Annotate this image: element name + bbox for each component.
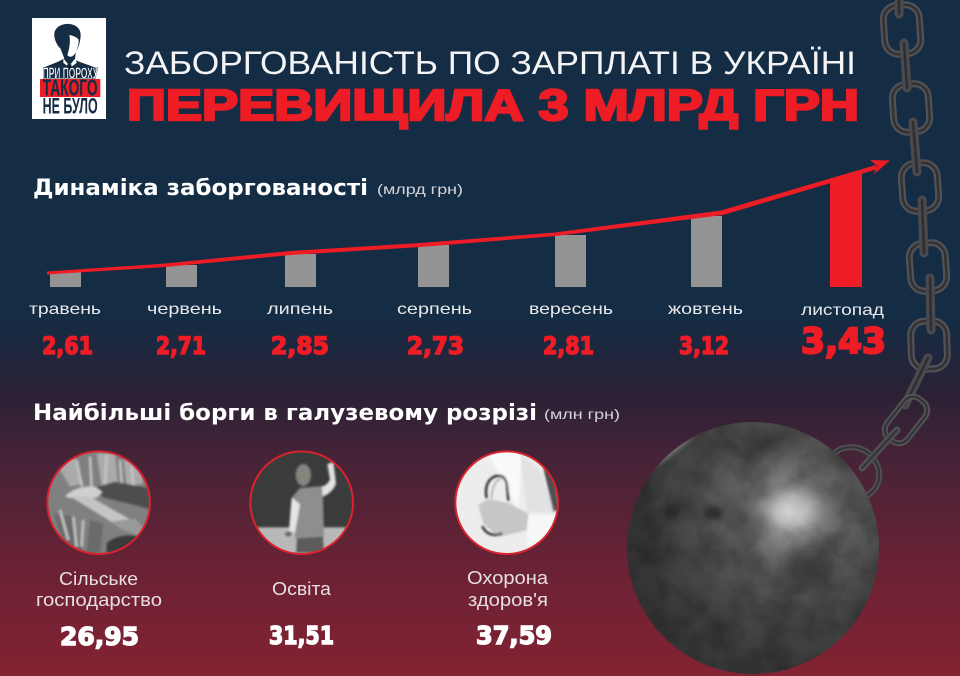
monthly values: 2,61 — [42, 332, 93, 360]
trend arrow — [47, 160, 890, 274]
sector labels — [36, 568, 549, 610]
month labels: серпень — [397, 301, 472, 318]
month labels: жовтень — [668, 301, 743, 318]
bar chart — [50, 171, 862, 287]
icon: healthcare photo — [455, 450, 559, 554]
monthly values: 2,71 — [156, 332, 206, 360]
month labels: травень — [29, 301, 101, 318]
title line 1: ЗАБОРГОВАНІСТЬ ПО ЗАРПЛАТІ В УКРАЇНІ — [124, 45, 856, 81]
month labels: листопад — [801, 302, 885, 319]
heading: dynamics: Динаміка заборгованості — [33, 176, 368, 201]
logo — [32, 18, 106, 119]
sector labels: Охорона — [467, 568, 549, 588]
sector labels: здоров'я — [468, 590, 548, 610]
chain — [836, 0, 948, 495]
month labels — [29, 301, 885, 319]
logo: ПРИ ПОРОХУ — [43, 65, 98, 82]
monthly values: 2,81 — [543, 332, 594, 360]
icon: education photo — [250, 451, 353, 557]
sector values: 31,51 — [269, 621, 334, 650]
unit: billion: (млрд грн) — [377, 181, 463, 197]
logo: НЕ БУЛО — [43, 94, 98, 119]
sector values — [60, 621, 552, 651]
logo: ТАКОГО — [43, 74, 98, 100]
month labels: вересень — [529, 301, 613, 318]
sector labels: Сільське — [59, 569, 138, 589]
monthly values: 2,85 — [271, 332, 329, 360]
monthly values — [42, 322, 886, 362]
title line 2: ПЕРЕВИЩИЛА 3 МЛРД ГРН — [127, 81, 859, 130]
wrecking ball — [627, 422, 879, 674]
monthly values: 3,12 — [679, 332, 729, 360]
sector values: 26,95 — [60, 622, 139, 651]
unit: million: (млн грн) — [544, 406, 620, 422]
month labels: червень — [147, 301, 222, 318]
monthly values: 2,73 — [407, 332, 464, 360]
icon: agriculture photo — [47, 451, 150, 557]
monthly values: 3,43 — [801, 322, 886, 362]
sector values: 37,59 — [476, 621, 552, 650]
sector labels: господарство — [36, 590, 162, 610]
heading: sectors: Найбільші борги в галузевому розрізі — [33, 401, 537, 426]
month labels: липень — [267, 301, 333, 318]
sector labels: Освіта — [272, 579, 332, 599]
